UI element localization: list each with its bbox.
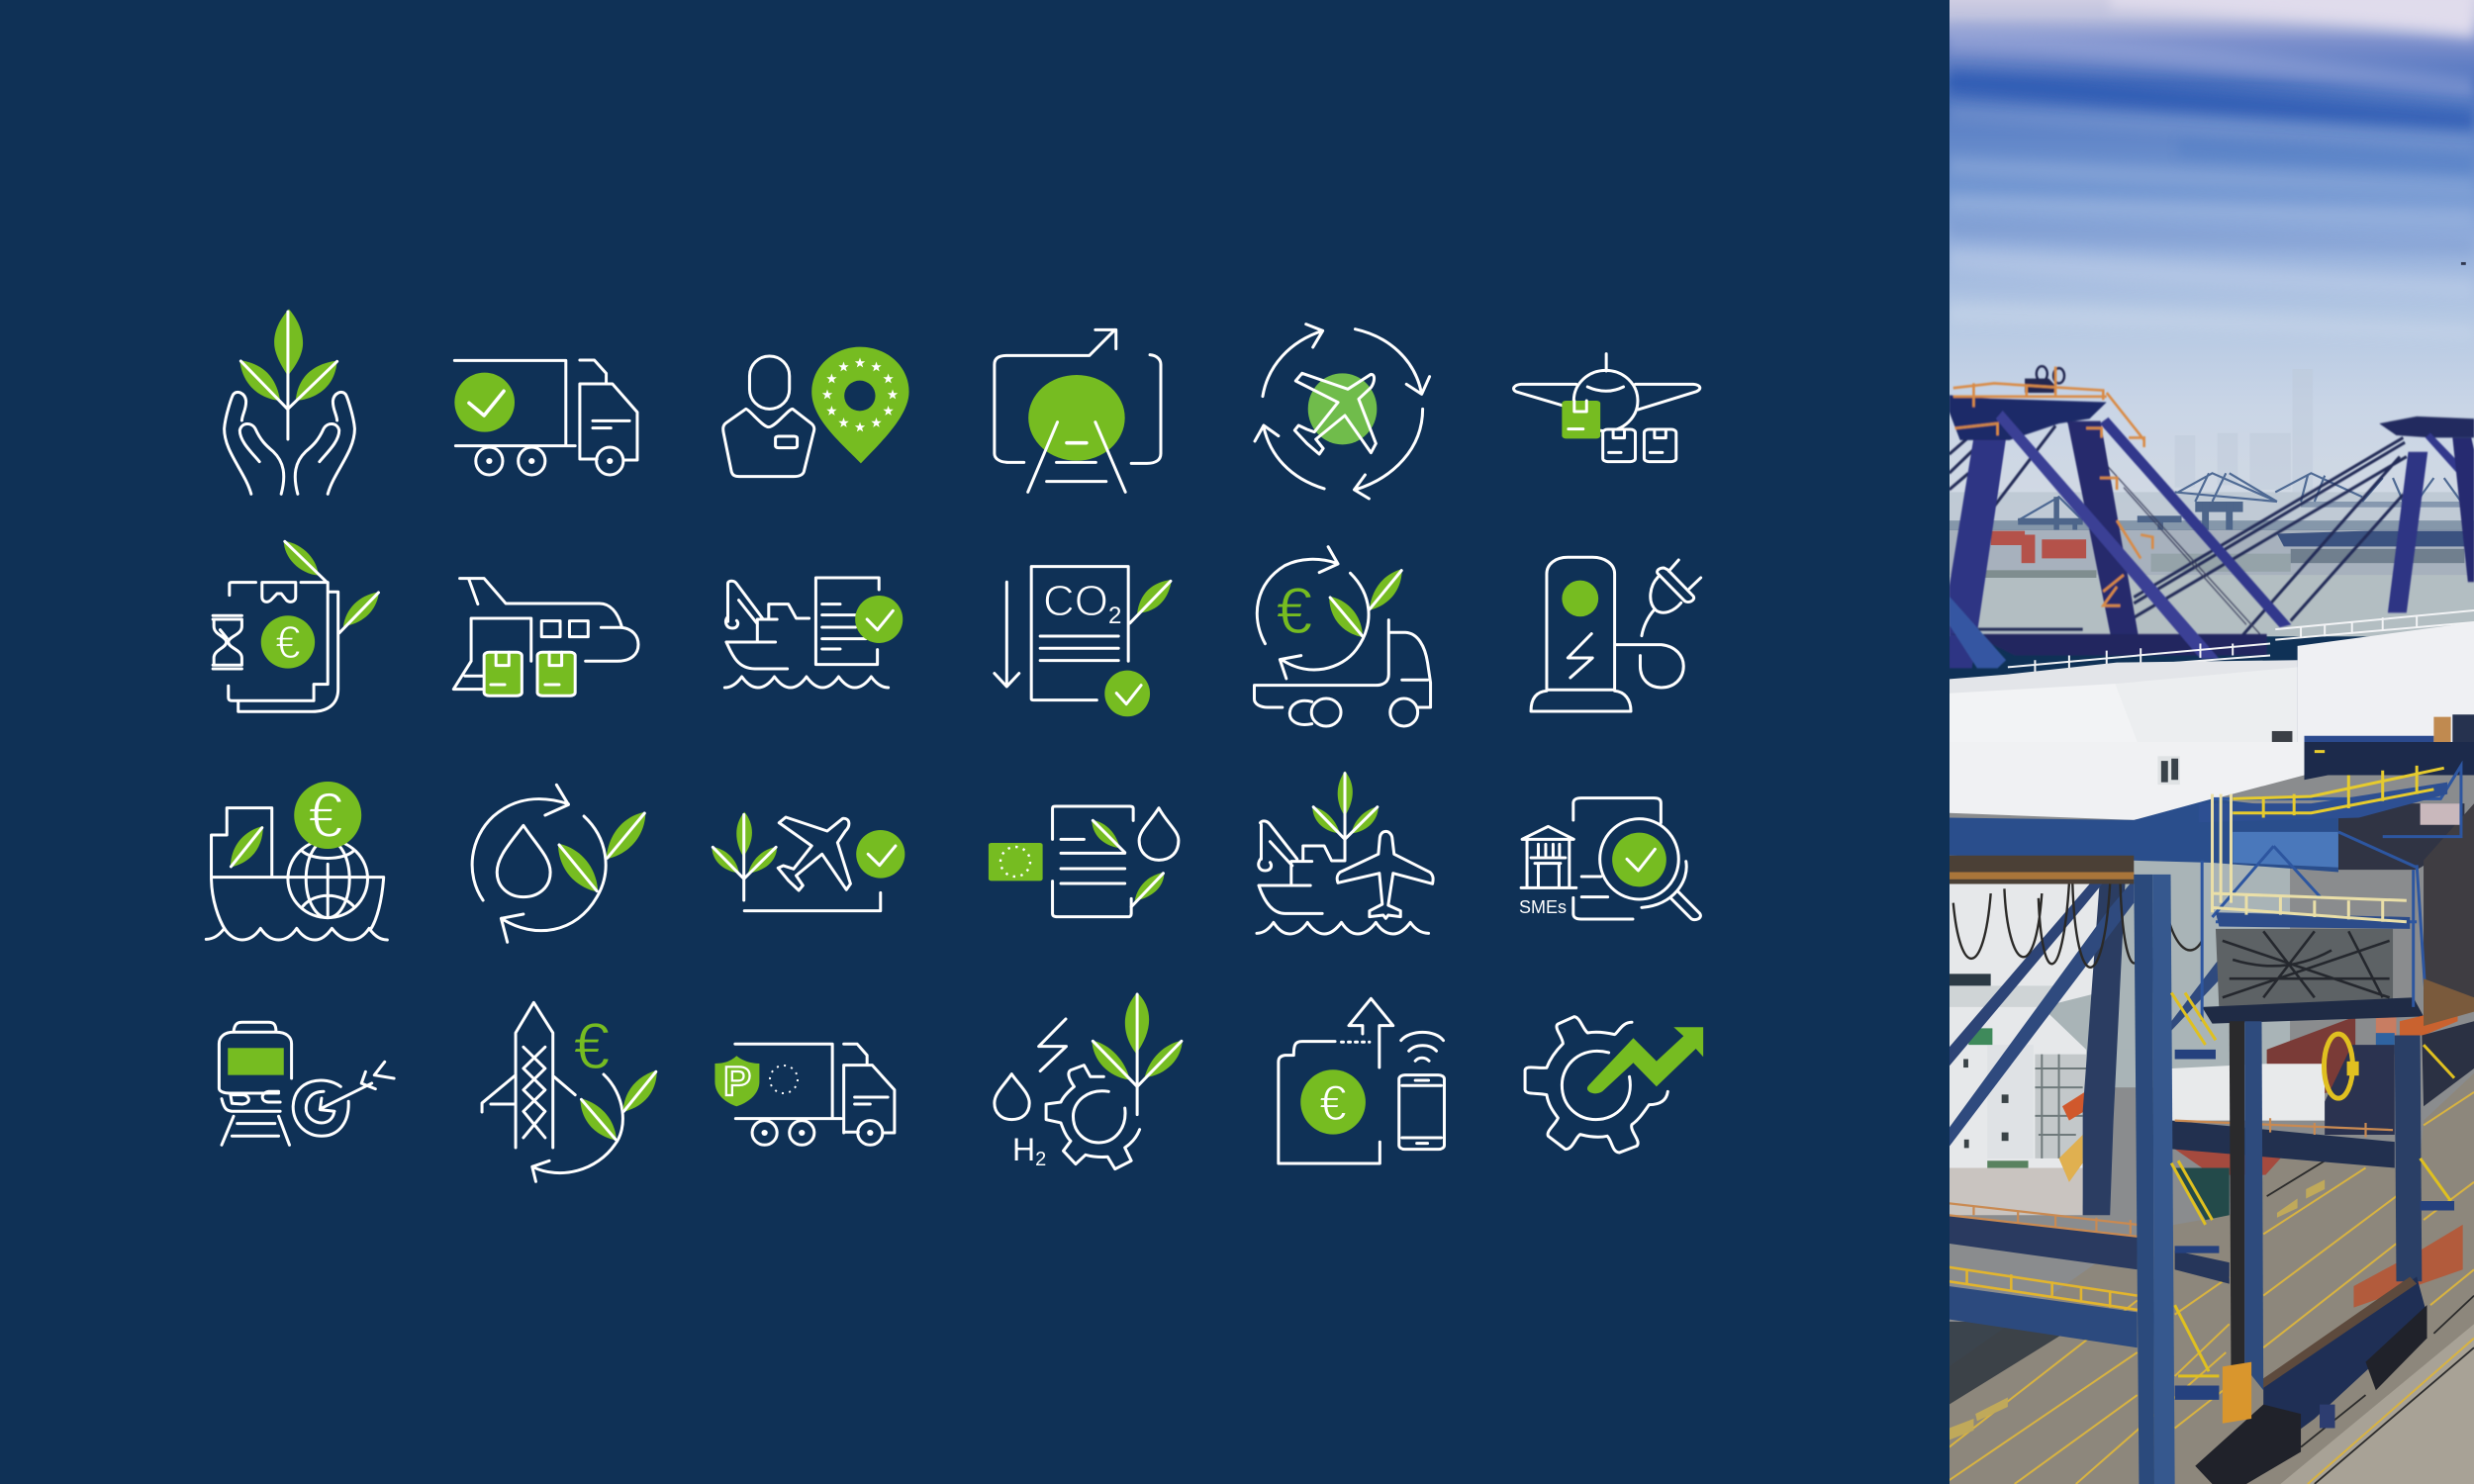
orange container: [2353, 1225, 2463, 1308]
icon: pylon with euro and leaves: €: [574, 1009, 610, 1082]
icon: hydrogen, energy, gear and plant: 2: [1035, 1149, 1046, 1170]
background panel: [0, 0, 1950, 1484]
water behind gantry: [1950, 851, 2290, 1087]
quay ground: [1950, 1073, 2474, 1484]
dark tower machinery: [2338, 803, 2464, 870]
photo: lower gantry and quay: [1940, 742, 2474, 1484]
photo: container port cranes: [1940, 0, 2474, 1484]
icon: euro document with upload arrow and phone: €: [1319, 1075, 1347, 1131]
back leg: [2083, 880, 2126, 1215]
icon: EV charging station with plug: [1531, 557, 1701, 711]
stem and hands: [225, 312, 354, 494]
photo: sky and upper cranes: [1940, 0, 2474, 742]
icon: person with EU location pin: [723, 347, 909, 477]
icon: euro document with upload arrow and phone: [1279, 998, 1444, 1163]
gantry sill beam: [2263, 1276, 2426, 1456]
icon: cargo plane with parcels: [453, 579, 638, 696]
icon: plant and plane with check mark: [712, 812, 904, 911]
yellow lane lines: [1950, 1092, 2474, 1484]
right leg: [2395, 1036, 2422, 1281]
icon: SMEs bank and magnifier: [1519, 798, 1700, 920]
icon: CO2 reduction document: CO: [1043, 577, 1108, 625]
icon: plant held in hands: [225, 309, 354, 494]
distant dark bridge: [2277, 531, 2466, 546]
icon: pylon with euro and leaves: [482, 1002, 657, 1181]
upper platform frames: [2216, 929, 2393, 1009]
icon: rail tunnel in frame with arrow: [995, 329, 1161, 492]
icon: euro recycling truck with leaves: €: [1277, 574, 1312, 647]
distant cranes: [2018, 473, 2461, 520]
icon: euro document with hourglass and leaves: [213, 541, 379, 711]
white railings: [2008, 610, 2474, 676]
icon: ship with globe and euro: [206, 780, 387, 940]
yellow railings: [2233, 752, 2444, 818]
icon: ship with approved document: [724, 578, 903, 688]
icon: euro recycling truck with leaves: [1254, 547, 1431, 726]
white machinery houses: [1950, 660, 2298, 742]
hull and ship amidships: [2266, 1019, 2355, 1094]
orange machinery box: [2223, 1362, 2251, 1424]
icon: water drop in circular arrows with leaves: [472, 785, 645, 942]
icon: CO2 reduction document: [995, 567, 1172, 716]
haze above harbour: [1950, 492, 2474, 530]
leaves: [239, 309, 337, 401]
icon: gear with rising green arrow: [1525, 1017, 1703, 1153]
bird: [2461, 262, 2466, 265]
icon: euro document with hourglass and leaves: €: [275, 616, 301, 668]
moored ship: [1950, 884, 2100, 1203]
icon: hydrogen, energy, gear and plant: [995, 992, 1183, 1170]
icon: EU flag with document, drop and leaves: [989, 806, 1179, 917]
yellow cable reel: [2324, 1034, 2352, 1098]
left cable deck: [1950, 856, 2134, 883]
left purple crane: [1950, 366, 2474, 668]
icon: CO2 reduction document: 2: [1108, 603, 1121, 629]
right purple crane: [2388, 452, 2427, 612]
icon: train and target with arrow: [219, 1022, 394, 1145]
icon: SMEs bank and magnifier: SMEs: [1519, 897, 1567, 917]
icon: hydrogen, energy, gear and plant: H: [1012, 1132, 1035, 1167]
icon: plant, ship and plane: [1257, 771, 1433, 934]
main beam and white house: [1950, 742, 2305, 820]
icon: ship with globe and euro: €: [308, 780, 343, 851]
main leg: [2134, 875, 2154, 1484]
icon: plane front view with parcels: [1514, 354, 1700, 462]
distant skyline: [2175, 476, 2313, 492]
centre leg: [2230, 1021, 2244, 1366]
harbour and water: [1950, 530, 2474, 578]
icon: truck with check mark: [454, 360, 637, 475]
diagonal braces: [1950, 884, 2102, 1067]
icon: plane in circular arrows: [1255, 325, 1430, 499]
hanging cables: [1953, 880, 2202, 968]
cross beams: [1950, 1215, 2138, 1269]
stairs: [2171, 992, 2454, 1376]
icon: truck with P shield and EU stars: [714, 1044, 895, 1145]
icon: truck with P shield and EU stars: P: [723, 1058, 751, 1104]
